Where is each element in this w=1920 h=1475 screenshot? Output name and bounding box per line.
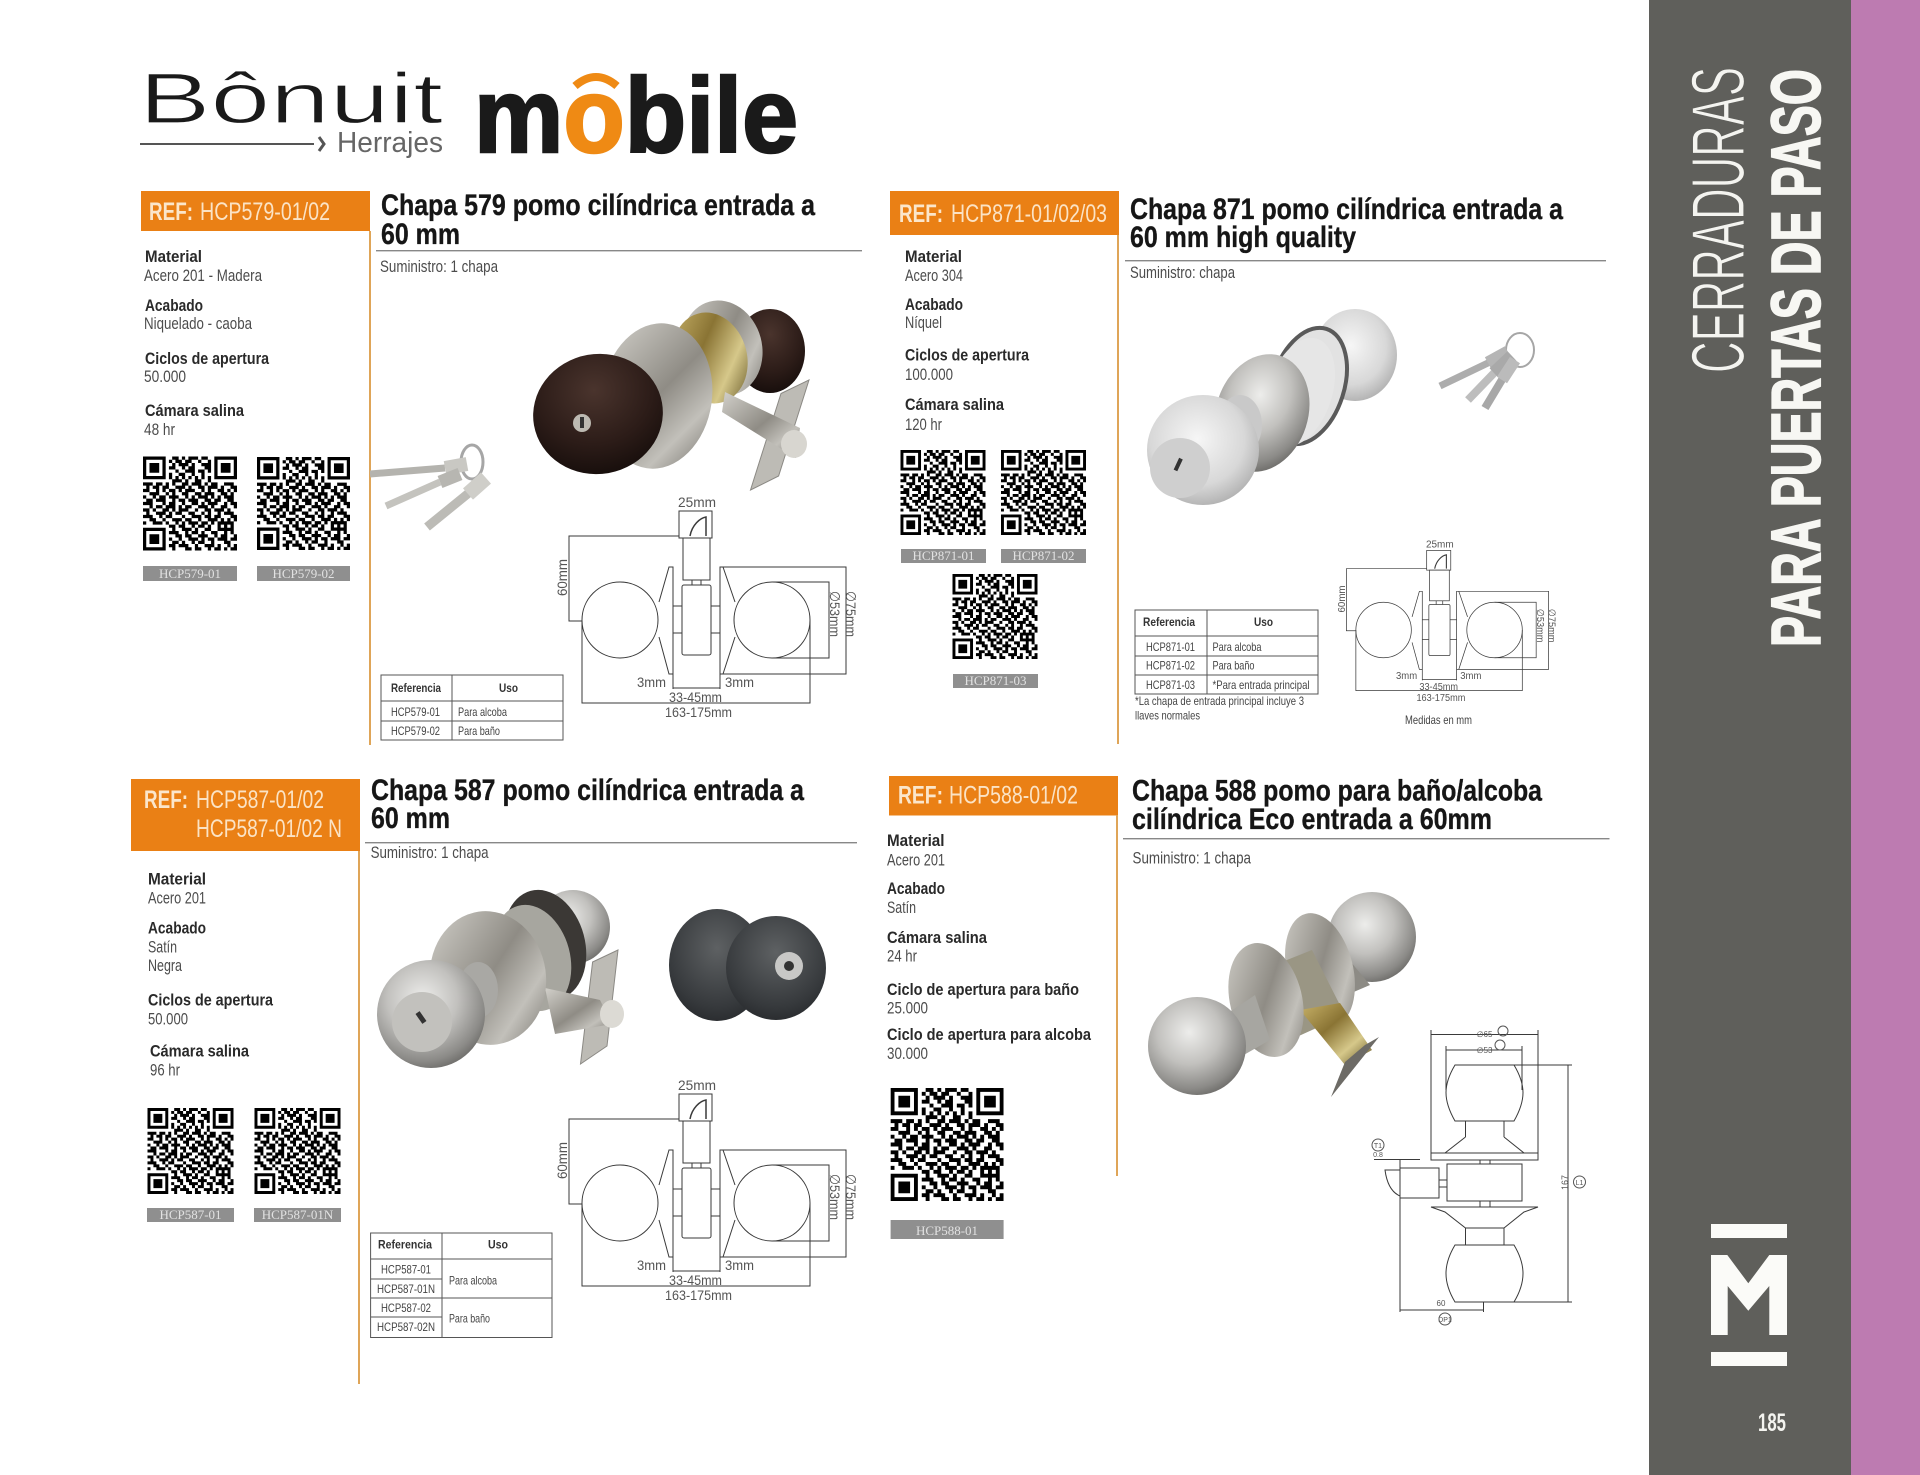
specs 587: Satín — [148, 938, 177, 957]
qr codes 871: HCP871-01 — [912, 548, 975, 563]
dimension drawing 579: 163-175mm — [665, 704, 732, 720]
specs 579: 50.000 — [144, 367, 186, 386]
keys 579 — [370, 445, 486, 527]
table 579: Referencia — [391, 681, 441, 695]
specs 579: Niquelado - caoba — [144, 314, 252, 333]
specs 871: Cámara salina — [905, 395, 1004, 414]
qr codes 579: HCP579-01 — [159, 566, 221, 581]
dimension drawing 871: 60mm — [1337, 585, 1348, 612]
ref tag 579: REF: — [149, 198, 193, 226]
specs 587: Ciclos de apertura — [148, 991, 273, 1010]
qr codes 871: HCP871-03 — [964, 673, 1027, 688]
dimension drawing 587: 60mm — [554, 1142, 570, 1179]
dimension drawing 579: 25mm — [678, 494, 716, 510]
ref tag 579 — [141, 191, 370, 231]
specs 579: Material — [145, 247, 202, 266]
brand logo: Bonuit Herrajes: Bônuit — [139, 60, 443, 139]
qr codes 871 — [900, 450, 1086, 688]
table 871: Para alcoba — [1212, 640, 1262, 654]
brand logo: Bonuit Herrajes: Herrajes — [337, 127, 443, 159]
table 579: HCP579-02 — [391, 724, 440, 738]
qr codes 871: HCP871-02 — [1012, 548, 1075, 563]
specs 871: Acero 304 — [905, 266, 963, 285]
dimension drawing 579: 33-45mm — [669, 689, 722, 705]
specs 587: 96 hr — [150, 1060, 180, 1080]
table 587: Para baño — [449, 1312, 490, 1326]
ref tag 871: HCP871-01/02/03 — [951, 200, 1107, 228]
table 587: Para alcoba — [449, 1274, 497, 1288]
dimension drawing 579: 60mm — [554, 559, 570, 596]
specs 579 — [144, 247, 269, 439]
lock photo 588 — [1148, 892, 1416, 1097]
dimension drawing 871 — [1337, 540, 1557, 704]
dimension drawing 588: DP1 — [1438, 1317, 1452, 1324]
ref tag 588: HCP588-01/02 — [949, 782, 1078, 810]
panel: chapa 588 — [887, 775, 1610, 1325]
dimension drawing 588: 0.8 — [1373, 1152, 1383, 1159]
title 588 — [1132, 775, 1542, 836]
ref tag 579: HCP579-01/02 — [200, 198, 330, 226]
title 871: 60 mm high quality — [1130, 221, 1356, 254]
dimension drawing 588: ∅65 — [1477, 1030, 1493, 1039]
ref tag 588 — [889, 776, 1118, 816]
dimension drawing 579: 3mm — [637, 674, 666, 690]
ref tag 871 — [890, 191, 1119, 235]
dimension drawing 871: 3mm — [1460, 671, 1481, 682]
lock photo 587 satin — [377, 881, 624, 1068]
specs 588: Satín — [887, 898, 916, 917]
specs 871: Acabado — [905, 295, 963, 314]
sidebar — [1649, 0, 1920, 1475]
table 579: Uso — [499, 681, 518, 695]
specs 579: Acero 201 - Madera — [144, 266, 262, 285]
qr codes 579 — [143, 456, 350, 581]
title 871 — [1130, 193, 1563, 254]
dimension drawing 871: 25mm — [1426, 540, 1454, 551]
specs 871: 120 hr — [905, 415, 942, 434]
icon: M logo — [1711, 1224, 1787, 1366]
table 587: HCP587-02N — [377, 1320, 435, 1334]
supply note 871: Suministro: chapa — [1130, 263, 1235, 282]
table 587: HCP587-01N — [377, 1282, 435, 1296]
dimension drawing 588: L1 — [1576, 1180, 1583, 1187]
specs 588: 30.000 — [887, 1044, 928, 1063]
lock photo 579 — [524, 291, 809, 490]
specs 871: Ciclos de apertura — [905, 346, 1029, 364]
dimension drawing 587 — [554, 1077, 859, 1303]
dimension drawing 588 — [1372, 1026, 1586, 1325]
panel: chapa 579 — [141, 189, 862, 745]
dimension drawing 587: 3mm — [637, 1257, 666, 1273]
page number: 185 — [1758, 1409, 1786, 1437]
ref tag 587: HCP587-01/02 N — [196, 815, 342, 843]
title 587: 60 mm — [371, 802, 450, 835]
specs 587 — [148, 870, 273, 1080]
dimension drawing 579 — [554, 494, 859, 720]
qr codes 587: HCP587-01 — [159, 1207, 222, 1222]
table 871: HCP871-01 — [1146, 640, 1195, 654]
table 587 — [371, 1233, 552, 1338]
dimension drawing 588: 167 — [1560, 1175, 1570, 1190]
dimension drawing 579: ∅53mm — [827, 591, 843, 637]
specs 587: Cámara salina — [150, 1042, 249, 1061]
specs 871: 100.000 — [905, 365, 953, 384]
supply note 588: Suministro: 1 chapa — [1132, 849, 1251, 868]
dimension drawing 588: T1 — [1374, 1143, 1382, 1150]
dimension drawing 587: 3mm — [725, 1257, 754, 1273]
lock photo 871 — [1147, 309, 1397, 505]
supply note 579: Suministro: 1 chapa — [380, 257, 498, 276]
dimension drawing 871: ∅75mm — [1546, 609, 1557, 642]
table 871: HCP871-03 — [1146, 678, 1195, 692]
title 588: cilíndrica Eco entrada a 60mm — [1132, 803, 1492, 836]
specs 579: Ciclos de apertura — [145, 349, 269, 368]
specs 587: 50.000 — [148, 1010, 188, 1028]
title 579 — [381, 189, 815, 251]
specs 871: Material — [905, 247, 962, 266]
keys 871 — [1440, 333, 1534, 408]
table 587: HCP587-01 — [381, 1262, 431, 1276]
dimension drawing 871: 3mm — [1396, 671, 1417, 682]
specs 588: Acero 201 — [887, 850, 945, 870]
dimension drawing 588: 60 — [1437, 1299, 1446, 1308]
title 579: 60 mm — [381, 218, 460, 251]
panel: chapa 587 — [131, 774, 859, 1384]
specs 579: Cámara salina — [145, 401, 244, 420]
table 587: HCP587-02 — [381, 1301, 431, 1315]
specs 579: 48 hr — [144, 420, 175, 439]
ref tag 871: REF: — [899, 200, 943, 228]
title 587: Chapa 587 pomo cilíndrica entrada a — [371, 774, 804, 807]
specs 587: Acabado — [148, 918, 206, 938]
table footnote 871: llaves normales — [1135, 708, 1200, 722]
specs 588: Material — [887, 831, 944, 850]
table 587: Uso — [488, 1238, 508, 1252]
specs 588: Acabado — [887, 879, 945, 898]
dimension drawing 579: 3mm — [725, 674, 754, 690]
ref tag 587: REF: — [144, 786, 188, 814]
specs 871 — [905, 247, 1029, 434]
dimension drawing 871: 33-45mm — [1419, 682, 1458, 693]
table 871: HCP871-02 — [1146, 658, 1195, 672]
dimension drawing 588: ∅53 — [1477, 1046, 1493, 1055]
table 871: Uso — [1254, 615, 1273, 629]
table footnote 871: *La chapa de entrada principal incluye 3 — [1135, 694, 1304, 708]
table 587: Referencia — [378, 1238, 432, 1252]
dimension drawing 871: 163-175mm — [1416, 693, 1465, 704]
table 871: Para baño — [1212, 658, 1255, 672]
panel: chapa 871 — [890, 191, 1606, 744]
qr codes 587: HCP587-01N — [262, 1207, 334, 1222]
dimension drawing 587: 25mm — [678, 1077, 716, 1093]
dimension drawing 587: ∅53mm — [827, 1174, 843, 1220]
title 871: Chapa 871 pomo cilíndrica entrada a — [1130, 193, 1563, 226]
specs 588: Ciclo de apertura para alcoba — [887, 1025, 1091, 1044]
table 579 — [381, 675, 563, 740]
specs 588: 24 hr — [887, 947, 917, 966]
table 871 — [1135, 610, 1318, 694]
brand logo: mobile: mobile — [474, 57, 798, 175]
specs 588: 25.000 — [887, 998, 928, 1017]
lock photo 587 black — [669, 909, 826, 1021]
specs 588 — [887, 831, 1091, 1063]
dimension drawing 579: ∅75mm — [843, 591, 859, 637]
specs 587: Material — [148, 870, 206, 888]
measures note: Medidas en mm — [1405, 713, 1472, 727]
title 587 — [371, 774, 804, 835]
specs 588: Ciclo de apertura para baño — [887, 980, 1079, 999]
qr codes 587 — [147, 1108, 341, 1222]
table 579: Para alcoba — [458, 705, 507, 719]
qr code 588: HCP588-01 — [916, 1223, 978, 1238]
title 579: Chapa 579 pomo cilíndrica entrada a — [381, 189, 815, 222]
table 579: HCP579-01 — [391, 705, 440, 719]
dimension drawing 587: 163-175mm — [665, 1287, 732, 1303]
dimension drawing 587: ∅75mm — [843, 1174, 859, 1220]
ref tag 587: HCP587-01/02 — [196, 786, 324, 814]
dimension drawing 587: 33-45mm — [669, 1272, 722, 1288]
qr codes 579: HCP579-02 — [272, 566, 335, 581]
table 871: Referencia — [1143, 615, 1195, 629]
ref tag 587 — [131, 779, 360, 851]
supply note 587: Suministro: 1 chapa — [371, 843, 489, 862]
specs 579: Acabado — [145, 296, 203, 315]
table 871: *Para entrada principal — [1212, 678, 1310, 692]
ref tag 588: REF: — [898, 782, 943, 810]
title 588: Chapa 588 pomo para baño/alcoba — [1132, 775, 1542, 808]
specs 871: Níquel — [905, 313, 942, 332]
brand logo: Bonuit Herrajes — [139, 60, 443, 159]
specs 587: Negra — [148, 956, 182, 975]
table footnote 871 — [1135, 694, 1304, 722]
qr code 588 — [891, 1088, 1004, 1239]
specs 588: Cámara salina — [887, 928, 987, 947]
dimension drawing 871: ∅53mm — [1534, 609, 1545, 642]
table 579: Para baño — [458, 724, 500, 738]
specs 587: Acero 201 — [148, 889, 206, 908]
